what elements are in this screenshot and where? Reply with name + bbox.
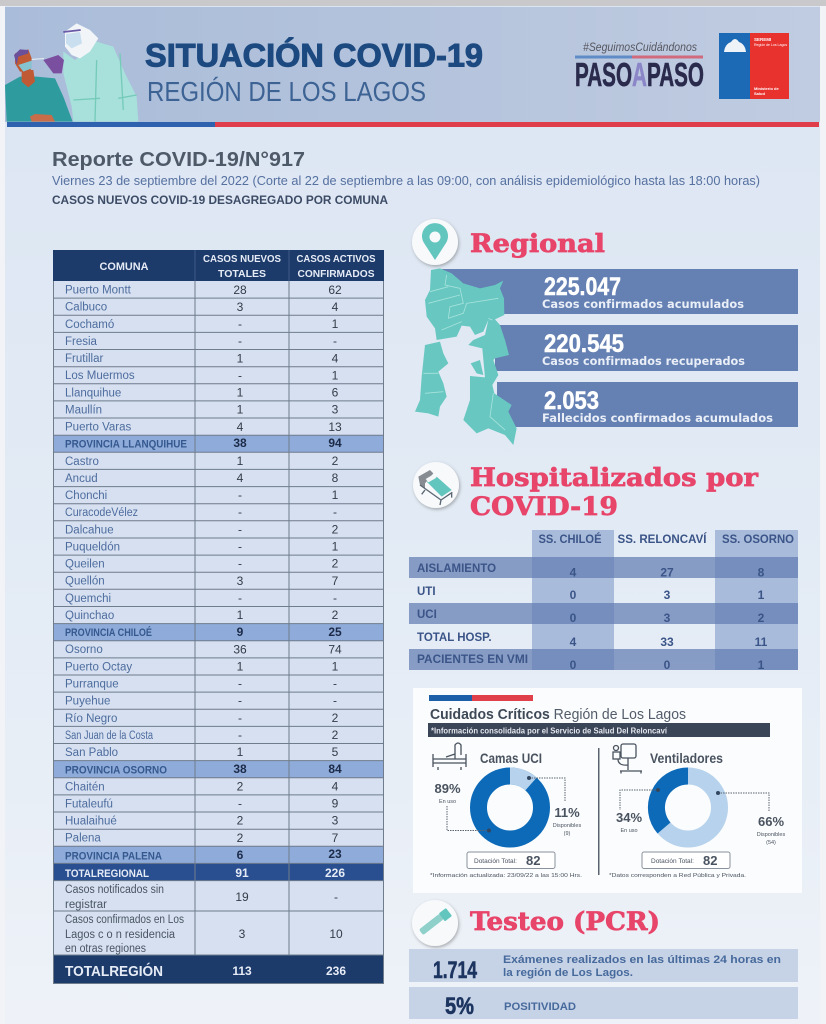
total region row: 236 bbox=[326, 964, 346, 978]
table rows: 6 bbox=[332, 386, 339, 400]
stat: casos recuperados: Casos confirmados recuperados bbox=[542, 354, 745, 368]
hospital table rows: 33 bbox=[660, 635, 674, 649]
table rows: 1 bbox=[237, 660, 244, 674]
regional stat bars bbox=[442, 269, 798, 427]
hospital table headers bbox=[538, 533, 794, 546]
total regional row: 226 bbox=[325, 866, 345, 880]
table rows: Los Muermos bbox=[65, 370, 135, 382]
heading: regional: Regional bbox=[470, 229, 605, 258]
table rows: Puerto Octay bbox=[65, 661, 132, 673]
table rows: - bbox=[238, 796, 242, 810]
stat: examenes: Exámenes realizados en las últimas 24 horas en bbox=[503, 954, 781, 966]
callout: 89% en uso bbox=[434, 781, 491, 832]
stat: examenes bbox=[409, 949, 798, 984]
callout: 11% disponibles: Disponibles bbox=[553, 823, 581, 829]
table rows: 7 bbox=[332, 831, 339, 845]
logo: paso a paso bbox=[575, 40, 704, 93]
hospital table rows: 0 bbox=[570, 658, 577, 672]
hospital table rows: AISLAMIENTO bbox=[417, 563, 496, 575]
callout: 66% disponibles: 66% bbox=[758, 814, 784, 829]
hospital table rows: 0 bbox=[570, 588, 577, 602]
footnote: ventiladores: *Datos corresponden a Red Pública y Privada. bbox=[609, 873, 747, 879]
table rows: 4 bbox=[237, 471, 244, 485]
total regional row: 91 bbox=[235, 866, 249, 880]
table rows: 62 bbox=[328, 283, 342, 297]
table rows: Chonchi bbox=[65, 490, 107, 502]
table rows: 23 bbox=[328, 847, 342, 861]
table rows: 3 bbox=[237, 300, 244, 314]
table rows: Puerto Montt bbox=[65, 284, 132, 296]
panel: regional bbox=[412, 219, 798, 445]
table rows: - bbox=[333, 334, 337, 348]
table rows: - bbox=[238, 505, 242, 519]
dotacion total: ventiladores: 82 bbox=[703, 853, 717, 868]
table rows: 2 bbox=[237, 831, 244, 845]
table rows: 2 bbox=[332, 454, 339, 468]
hospital table rows bbox=[417, 563, 768, 672]
casos confirmados row: 10 bbox=[329, 927, 343, 941]
table rows: Ancud bbox=[65, 473, 98, 485]
table rows: - bbox=[333, 676, 337, 690]
table rows: Hualaihué bbox=[65, 816, 117, 828]
table rows: - bbox=[238, 368, 242, 382]
table rows: 74 bbox=[328, 642, 342, 656]
note bar: *Información consolidada por el Servicio de Salud Del Reloncaví bbox=[431, 726, 668, 736]
map: region de los lagos bbox=[415, 268, 517, 445]
table rows: PROVINCIA LLANQUIHUE bbox=[65, 438, 187, 450]
table rows: PROVINCIA OSORNO bbox=[65, 764, 167, 776]
callout: 34% en uso bbox=[616, 788, 660, 834]
table header: CONFIRMADOS bbox=[298, 268, 374, 280]
donut chart: ventiladores bbox=[656, 776, 720, 839]
table rows: San Juan de la Costa bbox=[65, 730, 153, 742]
table rows: PROVINCIA PALENA bbox=[65, 850, 162, 862]
table rows: Cochamó bbox=[65, 319, 114, 331]
hospital table rows: PACIENTES EN VMI bbox=[417, 654, 528, 666]
logo: ministerio de salud: Salud bbox=[754, 91, 765, 96]
table header bbox=[53, 250, 384, 281]
casos notificados row: Casos notificados sin bbox=[65, 884, 164, 896]
table rows: Queilen bbox=[65, 559, 105, 571]
hospital table rows: 3 bbox=[664, 611, 671, 625]
hospital table rows: 0 bbox=[570, 611, 577, 625]
table rows: Río Negro bbox=[65, 713, 117, 725]
casos confirmados row: 3 bbox=[239, 927, 246, 941]
logo: ministerio de salud: Región de Los Lagos bbox=[754, 43, 787, 47]
table rows: 13 bbox=[328, 420, 342, 434]
title bbox=[145, 38, 483, 107]
table rows: 9 bbox=[237, 625, 244, 639]
table rows: - bbox=[238, 540, 242, 554]
note bar bbox=[428, 723, 770, 737]
heading: ventiladores: Ventiladores bbox=[650, 750, 723, 766]
total region row: 113 bbox=[232, 964, 252, 978]
report heading: CASOS NUEVOS COVID-19 DESAGREGADO POR COMUNA bbox=[52, 193, 388, 207]
table rows: Chaitén bbox=[65, 781, 105, 793]
table rows: 8 bbox=[332, 471, 339, 485]
table rows: 1 bbox=[332, 540, 339, 554]
table rows: 2 bbox=[332, 522, 339, 536]
icon: pcr test bbox=[412, 900, 458, 946]
table rows: 38 bbox=[233, 762, 247, 776]
table header: CASOS NUEVOS bbox=[203, 253, 281, 265]
hospital table rows: 11 bbox=[755, 635, 768, 649]
table rows: 1 bbox=[332, 488, 339, 502]
casos confirmados row: Casos confirmados en Los bbox=[65, 914, 184, 926]
table rows: - bbox=[238, 556, 242, 570]
dotacion total: uci: Dotación Total: bbox=[474, 858, 517, 865]
panel: hospitalizados bbox=[409, 462, 798, 672]
stat: casos recuperados bbox=[542, 330, 745, 368]
table rows: 1 bbox=[237, 352, 244, 366]
stat: positividad: POSITIVIDAD bbox=[504, 1001, 576, 1013]
callout: 89% en uso: En uso bbox=[439, 799, 456, 805]
table rows: 25 bbox=[328, 625, 342, 639]
stat: fallecidos: Fallecidos confirmados acumulados bbox=[542, 411, 773, 425]
table rows: 4 bbox=[237, 420, 244, 434]
callout: 66% disponibles bbox=[716, 791, 785, 846]
table rows: Purranque bbox=[65, 678, 119, 690]
table rows: 2 bbox=[237, 780, 244, 794]
table rows: 2 bbox=[332, 608, 339, 622]
hospital table rows: 4 bbox=[570, 566, 577, 580]
table rows: 38 bbox=[233, 436, 247, 450]
dotacion total: uci: 82 bbox=[526, 853, 540, 868]
table rows: 1 bbox=[237, 745, 244, 759]
footnote: uci: *Información actualizada: 23/09/22 a las 15:00 Hrs. bbox=[430, 873, 583, 879]
dotacion total: ventiladores bbox=[642, 852, 730, 868]
hospital table rows: 3 bbox=[664, 588, 671, 602]
table rows: Puyehue bbox=[65, 696, 110, 708]
report heading: Reporte COVID-19/N°917 bbox=[52, 149, 305, 171]
heading: hospitalizados: COVID-19 bbox=[470, 492, 618, 521]
table header: TOTALES bbox=[218, 268, 266, 280]
table rows: 2 bbox=[332, 556, 339, 570]
table rows: Osorno bbox=[65, 644, 103, 656]
stat: examenes: la región de Los Lagos. bbox=[503, 967, 633, 979]
total regional row bbox=[65, 866, 345, 880]
table header: COMUNA bbox=[100, 261, 149, 273]
table rows: 1 bbox=[237, 608, 244, 622]
stat: positividad bbox=[409, 987, 798, 1020]
table rows: 94 bbox=[328, 436, 342, 450]
table rows: 1 bbox=[237, 386, 244, 400]
total region row bbox=[65, 962, 346, 980]
dotacion total: ventiladores: Dotación Total: bbox=[651, 858, 694, 865]
table rows: Palena bbox=[65, 833, 101, 845]
casos notificados row: - bbox=[334, 890, 338, 904]
table rows: 36 bbox=[233, 642, 247, 656]
casos notificados row: registrar bbox=[65, 899, 107, 911]
hospital table headers: SS. CHILOÉ bbox=[538, 533, 602, 546]
hospital table headers: SS. OSORNO bbox=[722, 534, 794, 546]
report heading bbox=[52, 149, 760, 207]
table rows: - bbox=[238, 488, 242, 502]
stat: positividad: 5% bbox=[445, 993, 474, 1020]
title: SITUACIÓN COVID-19 bbox=[145, 38, 483, 74]
callout: 11% disponibles: (9) bbox=[564, 831, 571, 837]
hospital table rows: 0 bbox=[664, 658, 671, 672]
logo: ministerio de salud: Ministerio de bbox=[754, 86, 779, 91]
table rows: 1 bbox=[237, 402, 244, 416]
hospital table headers: SS. RELONCAVÍ bbox=[618, 533, 707, 546]
heading: cuidados criticos: Cuidados Críticos Región de Los Lagos bbox=[430, 707, 686, 723]
hospital table rows: 8 bbox=[758, 566, 765, 580]
table rows: 84 bbox=[328, 762, 342, 776]
heading: hospitalizados: Hospitalizados por bbox=[470, 463, 759, 492]
logo: ministerio de salud bbox=[719, 33, 789, 99]
table rows: 2 bbox=[332, 711, 339, 725]
table rows: 5 bbox=[332, 745, 339, 759]
table rows: - bbox=[238, 591, 242, 605]
table rows: 4 bbox=[332, 352, 339, 366]
table rows: - bbox=[333, 591, 337, 605]
table rows: - bbox=[238, 694, 242, 708]
logo: paso a paso: #SeguimosCuidándonos bbox=[583, 40, 697, 54]
table: casos por comuna bbox=[53, 250, 384, 984]
title: REGIÓN DE LOS LAGOS bbox=[147, 76, 426, 107]
table rows: PROVINCIA CHILOÉ bbox=[65, 626, 152, 639]
hospital table rows: 1 bbox=[758, 658, 765, 672]
stat: casos acumulados bbox=[542, 273, 744, 311]
table rows: CuracodeVélez bbox=[65, 507, 138, 519]
callout: 34% en uso: En uso bbox=[620, 828, 638, 834]
heading: testeo: Testeo (PCR) bbox=[470, 907, 660, 936]
casos confirmados row: en otras regiones bbox=[65, 943, 146, 955]
dotacion total: uci bbox=[467, 852, 555, 868]
table rows: Puerto Varas bbox=[65, 422, 132, 434]
hospital table rows: 4 bbox=[570, 635, 577, 649]
icon: ventilator bbox=[613, 744, 642, 774]
table rows: 9 bbox=[332, 796, 339, 810]
table rows: Quinchao bbox=[65, 610, 114, 622]
table rows: - bbox=[238, 711, 242, 725]
illustration: health workers bbox=[5, 23, 138, 122]
panel: cuidados criticos bbox=[413, 688, 802, 893]
hospital table rows: UTI bbox=[417, 586, 436, 598]
table rows: Llanquihue bbox=[65, 387, 121, 399]
stat: casos recuperados: 220.545 bbox=[544, 330, 624, 358]
table rows: 3 bbox=[332, 814, 339, 828]
callout: 66% disponibles: (54) bbox=[766, 840, 776, 846]
casos notificados row: 19 bbox=[235, 890, 249, 904]
table rows: Castro bbox=[65, 456, 99, 468]
casos confirmados row: Lagos c o n residencia bbox=[65, 929, 176, 941]
stat: casos acumulados: Casos confirmados acumulados bbox=[542, 297, 744, 311]
donut chart: camas uci bbox=[478, 776, 542, 839]
table rows: Fresia bbox=[65, 336, 98, 348]
heading: hospitalizados bbox=[470, 463, 759, 521]
stat: examenes: 1.714 bbox=[433, 957, 477, 984]
hospital table rows: 27 bbox=[660, 566, 674, 580]
table rows: 2 bbox=[237, 814, 244, 828]
hospital table rows: TOTAL HOSP. bbox=[417, 632, 492, 644]
table rows: 3 bbox=[332, 402, 339, 416]
table rows: 1 bbox=[237, 454, 244, 468]
table rows: 1 bbox=[332, 368, 339, 382]
table rows: - bbox=[238, 334, 242, 348]
casos confirmados row bbox=[65, 914, 343, 955]
table rows: Frutillar bbox=[65, 353, 104, 365]
table rows: San Pablo bbox=[65, 747, 118, 759]
table rows: Quemchi bbox=[65, 593, 111, 605]
table rows: - bbox=[238, 676, 242, 690]
hospital table rows: 1 bbox=[758, 588, 765, 602]
table rows: 4 bbox=[332, 300, 339, 314]
table rows: Maullín bbox=[65, 404, 102, 416]
icon: location pin bbox=[412, 219, 458, 265]
table rows: Quellón bbox=[65, 576, 105, 588]
table rows: 3 bbox=[237, 574, 244, 588]
casos notificados row bbox=[65, 884, 338, 911]
hospital table rows: 2 bbox=[758, 611, 765, 625]
table rows: Puqueldón bbox=[65, 542, 120, 554]
table rows: 1 bbox=[332, 660, 339, 674]
table header: CASOS ACTIVOS bbox=[296, 253, 376, 265]
table rows: Futaleufú bbox=[65, 798, 113, 810]
table rows: - bbox=[333, 505, 337, 519]
logo: ministerio de salud: SEREMI bbox=[754, 37, 771, 42]
stat: fallecidos bbox=[542, 387, 773, 425]
total region row: TOTALREGIÓN bbox=[65, 962, 163, 980]
callout: 89% en uso: 89% bbox=[434, 781, 461, 796]
heading: camas uci: Camas UCI bbox=[480, 750, 542, 766]
icon: uci bed bbox=[433, 743, 466, 770]
table rows: 4 bbox=[332, 780, 339, 794]
table rows bbox=[65, 283, 342, 862]
stat: fallecidos: 2.053 bbox=[544, 387, 599, 415]
stat: casos acumulados: 225.047 bbox=[544, 273, 621, 301]
header band bbox=[5, 7, 820, 127]
table rows: 7 bbox=[332, 574, 339, 588]
total regional row: TOTALREGIONAL bbox=[65, 868, 149, 880]
callout: 11% disponibles bbox=[527, 776, 581, 837]
report heading: Viernes 23 de septiembre del 2022 (Corte al 22 de septiembre a las 09:00, con análisis epidemiológico hasta las 18:00 horas) bbox=[52, 173, 760, 188]
hospital table bands bbox=[409, 530, 798, 670]
divider bbox=[598, 748, 600, 875]
table rows: 2 bbox=[332, 728, 339, 742]
callout: 66% disponibles: Disponibles bbox=[757, 832, 785, 838]
hospital table rows: UCI bbox=[417, 609, 437, 621]
table rows: 1 bbox=[332, 317, 339, 331]
logo: paso a paso: PASOAPASO bbox=[575, 56, 704, 93]
table rows: - bbox=[238, 317, 242, 331]
callout: 34% en uso: 34% bbox=[616, 810, 642, 825]
table rows: - bbox=[333, 694, 337, 708]
icon: hospital bed bbox=[413, 462, 459, 508]
table rows: Dalcahue bbox=[65, 524, 114, 536]
table rows: 6 bbox=[237, 848, 244, 862]
table rows: - bbox=[238, 522, 242, 536]
table rows: - bbox=[238, 728, 242, 742]
panel: testeo bbox=[409, 900, 798, 1020]
callout: 11% disponibles: 11% bbox=[554, 805, 580, 820]
table rows: 28 bbox=[233, 283, 247, 297]
table rows: Calbuco bbox=[65, 302, 107, 314]
